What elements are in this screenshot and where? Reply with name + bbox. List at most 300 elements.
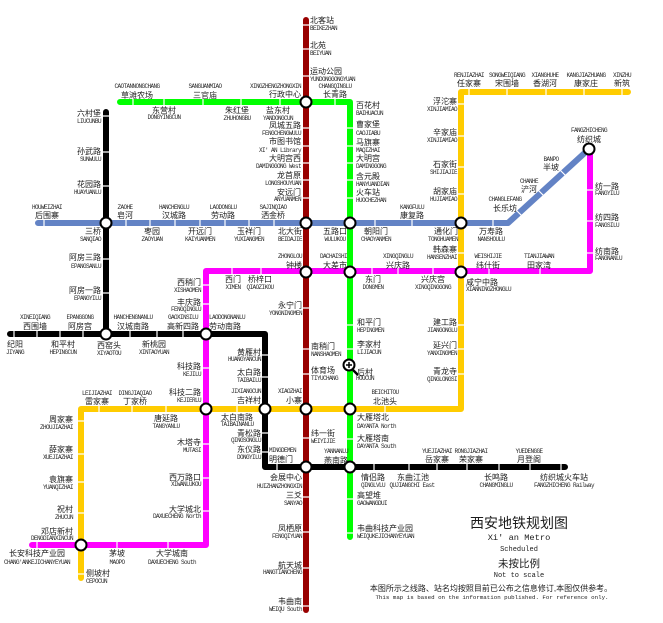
line: green <box>120 98 355 537</box>
labels: blue line, above: 洒金桥 <box>261 210 285 220</box>
labels: black line 2 vertical: JIXIANGCUN <box>231 388 262 395</box>
labels: red line north, east side: YUNDONGGONGYUAN <box>310 76 356 83</box>
labels: black line 2 vertical: XIAOZHAI <box>278 388 302 395</box>
labels: green line horizontal: 朱红堡 <box>225 105 249 115</box>
label: Xianning Zhonglu: XIANNINGZHONGLU <box>466 286 512 293</box>
title block <box>470 515 568 580</box>
labels: magenta line west vertical: XISHAOMEN <box>174 287 202 294</box>
labels: magenta line east: FANGNANLU <box>595 255 623 262</box>
labels: yellow line top: 新筑 <box>614 78 630 88</box>
labels: red line south, east side <box>311 341 342 445</box>
labels: red line south, west side <box>257 300 303 613</box>
labels: blue line, northeast branch: 浐河 <box>521 184 537 194</box>
labels: magenta line, below: 西门 <box>225 274 241 284</box>
labels: yellow line horizontal: LEIJIAZHAI <box>82 390 112 397</box>
labels: red line north, west side: XI' AN Library <box>259 147 302 154</box>
labels: magenta line east: FANGSILU <box>595 222 620 229</box>
labels: magenta line west vertical <box>153 277 202 520</box>
labels: magenta line, above: TIANJIAWAN <box>524 253 555 260</box>
labels: black line north: SANQIAO <box>80 236 102 243</box>
labels: black line east: QUJIANGCHI East <box>389 482 435 489</box>
labels: blue line, below <box>141 226 505 243</box>
labels: red line north, east side: BEIYUAN <box>310 50 332 57</box>
labels: red line north, west side: FENGCHENGWULU <box>262 130 302 137</box>
labels: blue line, below: KAIYUANMEN <box>185 236 216 243</box>
labels: red line north, west side: XINGZHENGZHONGXIN <box>250 83 302 90</box>
disclaimer note: This map is based on the information published. For reference only. <box>375 594 609 601</box>
labels: red line north, west side: 市图书馆 <box>269 136 301 146</box>
labels: black line east <box>361 448 595 489</box>
labels: yellow line north-south: 建工路 <box>433 317 457 327</box>
labels: yellow line horizontal: TANGYANLU <box>152 423 180 430</box>
labels: black line west, above: XINEIQIANG <box>20 314 51 321</box>
labels: black line west, below: 和平村 <box>51 339 75 349</box>
labels: black line north: EPANGYILU <box>74 295 102 302</box>
line: yellow <box>76 88 628 578</box>
labels: yellow line north-south <box>427 96 459 383</box>
labels: yellow line north-south: JIANGONGLU <box>427 327 458 334</box>
labels: magenta line, below: 兴庆宫 <box>421 274 445 284</box>
labels: yellow line top: SONGWEIQIANG <box>489 72 526 79</box>
labels: red line north, west side: DAMINGGONG West <box>256 163 301 170</box>
labels: blue line, below: 北大街 <box>278 226 302 236</box>
label: Xianning Zhonglu <box>466 277 512 293</box>
label: Laodong Nanlu <box>209 314 246 331</box>
labels: blue line, above: ZAOHE <box>117 204 133 211</box>
labels: magenta line east: FANGYILU <box>595 190 620 197</box>
labels: green line horizontal <box>114 83 352 122</box>
disclaimer note: 本图所示之线路、站名均按照目前已公布之信息修订,本图仅供参考。 <box>370 583 612 593</box>
labels: red line south, east side: 纬一街 <box>311 428 335 438</box>
labels: black line north: SUNWULU <box>80 156 102 163</box>
labels: green line vertical: LIJIACUN <box>357 349 382 356</box>
labels: yellow line west vertical: ZHUCUN <box>55 514 74 521</box>
labels: red line north, west side: LONGSHOUYUAN <box>265 180 302 187</box>
labels: yellow line west vertical: ZHOUJIAZHAI <box>40 424 73 431</box>
labels: red line north, west side: 安远门 <box>277 187 301 197</box>
labels: yellow line north-south: QINGLONGSI <box>427 376 457 383</box>
labels: blue line, above: HOUWEIZHAI <box>32 204 62 211</box>
labels: black line 2 vertical: DONGYILU <box>237 454 262 461</box>
labels: yellow line horizontal: 太白南路 <box>221 412 253 422</box>
labels: magenta line west vertical: XIWANLUKOU <box>171 481 202 488</box>
label: Cepocun: CEPOCUN <box>86 578 108 585</box>
labels: green line vertical: 百花村 <box>356 100 380 110</box>
labels: green line vertical: HANYUANDIAN <box>356 181 390 188</box>
title block: Xi' an Metro <box>488 533 550 543</box>
labels: red line south, west side: YONGNINGMEN <box>269 310 303 317</box>
labels: red line south, west side: HANGTIANCHENG <box>263 569 303 576</box>
labels: magenta line, interchange tops: ZHONGLOU <box>278 253 303 260</box>
labels: blue line, northeast branch: FANGZHICHENG <box>571 127 608 134</box>
labels: magenta line west vertical: KEJIERLU <box>177 397 202 404</box>
labels: magenta line, above: WEISHIJIE <box>474 253 502 260</box>
labels: black line west, below <box>6 339 170 357</box>
labels: yellow line horizontal: BEICHITOU <box>371 389 399 396</box>
labels: magenta line south <box>4 548 197 566</box>
labels: yellow line north-south: SHIJIAJIE <box>430 169 458 176</box>
labels: green line vertical: 韦曲科技产业园 <box>357 523 413 533</box>
label: Yannanlu: YANNANLU <box>324 448 349 455</box>
labels: black line west, below: HEPINGCUN <box>49 349 77 356</box>
labels: red line south, west side: 会展中心 <box>270 472 302 482</box>
labels: yellow line top: 香湖河 <box>533 78 557 88</box>
labels: green line horizontal: CAOTANNONGCHANG <box>114 83 161 90</box>
labels: blue line, above: 皂河 <box>117 210 133 220</box>
labels: yellow line west vertical: YUANQIZHAI <box>43 484 73 491</box>
labels: yellow line north-south: 浮沱寨 <box>433 96 457 106</box>
labels: black line west, below: 新桃园 <box>142 339 166 349</box>
labels: black line 2 vertical <box>228 347 302 461</box>
labels: black line north: 三桥 <box>85 226 101 236</box>
labels: black line east: 岳家寨 <box>425 454 449 464</box>
labels: black line east: 长鸣路 <box>484 472 508 482</box>
labels: blue line, above: 劳动路 <box>211 210 235 220</box>
labels: black line east: RONGJIAZHAI <box>454 448 488 455</box>
labels: black line west, above: 高新四路 <box>167 321 199 331</box>
labels: magenta line, below: QIAOZIKOU <box>246 284 274 291</box>
labels: magenta line south: 长安科技产业园 <box>9 548 65 558</box>
labels: yellow line west vertical: 邓店新村 <box>41 526 73 536</box>
labels: magenta line west vertical: 丰庆路 <box>177 297 201 307</box>
labels: black line north: 阿房三路 <box>69 252 101 262</box>
labels: black line west, above: GAOXINSILU <box>168 314 199 321</box>
label: Cepocun: 侧坡村 <box>86 568 110 578</box>
labels: black line north: 孙武路 <box>77 146 101 156</box>
labels: magenta line, interchange tops <box>278 253 347 270</box>
labels: yellow line north-south: HUJIAMIAO <box>430 196 458 203</box>
labels: green line horizontal: ZHUHONGBU <box>223 115 251 122</box>
labels: blue line, northeast branch: 半坡 <box>543 162 559 172</box>
labels: yellow line horizontal: TAIBAINANLU <box>220 421 254 428</box>
interchange stations <box>76 96 594 550</box>
labels: yellow line north-south: 胡家庙 <box>433 186 457 196</box>
labels: black line west, above: 汉城南路 <box>117 321 149 331</box>
labels: blue line, below: 朝阳门 <box>364 226 388 236</box>
labels: green line vertical: 大明宫 <box>356 153 380 163</box>
labels: magenta line west vertical: FENGQINGLU <box>171 306 202 313</box>
labels: green line vertical: 火车站 <box>356 187 380 197</box>
labels: blue line, northeast branch: CHANGLEFANG <box>488 196 522 203</box>
labels: yellow line west vertical <box>31 414 74 542</box>
labels: yellow line west vertical: 袁旗寨 <box>49 474 73 484</box>
labels: black line 2 vertical: 青松路 <box>237 428 261 438</box>
labels: magenta line, above: 兴庆路 <box>386 260 410 270</box>
labels: black line 2 vertical: QINGSONGLU <box>231 437 262 444</box>
labels: green line horizontal: 长青路 <box>323 89 347 99</box>
labels: yellow line top: RENJIAZHAI <box>454 72 484 79</box>
labels: black line west, below: XINTAOYUAN <box>139 349 170 356</box>
labels: green line horizontal: 三官庙 <box>193 90 217 100</box>
title block: Scheduled <box>500 546 538 554</box>
labels: green line vertical: 曹家堡 <box>356 119 380 129</box>
labels: yellow line west vertical: 祝村 <box>57 504 73 514</box>
labels: magenta line west vertical: 西万路口 <box>169 472 201 482</box>
labels: magenta line south: MAOPO <box>109 559 125 566</box>
labels: black line east: 纺织城火车站 <box>540 472 588 482</box>
labels: black line west, above: 西围墙 <box>23 321 47 331</box>
labels: magenta line, above: 纬什街 <box>476 260 500 270</box>
labels: yellow line north-south: XINJIAMIAO <box>427 106 458 113</box>
labels: yellow line horizontal: 唐延路 <box>154 413 178 423</box>
labels: magenta line east <box>595 181 623 262</box>
labels: red line north, west side: 大明宫西 <box>269 153 301 163</box>
labels: green line horizontal: CHANGQINGLU <box>318 83 352 90</box>
labels: red line south, east side: NANSHAOMEN <box>311 351 342 358</box>
labels: magenta line south: 茅坡 <box>109 548 125 558</box>
icon: magnifier cursor <box>344 360 358 375</box>
labels: black line west, above: 阿房宫 <box>68 321 92 331</box>
labels: red line south, west side: FENGQIYUAN <box>272 533 303 540</box>
labels: yellow line top: XIANGHUHE <box>531 72 559 79</box>
labels: magenta line, above: 田家湾 <box>527 260 551 270</box>
labels: blue line, below: YUXIANGMEN <box>234 236 265 243</box>
labels: blue line, below: WULUKOU <box>324 236 346 243</box>
labels: magenta line west vertical: 大学城北 <box>169 504 201 514</box>
label: Laodong Nanlu: 劳动南路 <box>209 321 241 331</box>
labels: green line vertical: 李家村 <box>357 339 381 349</box>
labels: yellow line west vertical: DENGDIANXINCUN <box>31 535 74 542</box>
labels: blue line, above: LAODONGLU <box>209 204 237 211</box>
label: Yannanlu <box>324 448 349 465</box>
labels: yellow line north-south: 石家街 <box>433 159 457 169</box>
labels: black line east: QINGLVLU <box>361 482 386 489</box>
labels: black line west, below: JIYANG <box>6 349 25 356</box>
labels: red line north, west side: 龙首原 <box>277 170 301 180</box>
label: Yannanlu: 燕南路 <box>324 455 348 465</box>
label: Mingdemen: 明德门 <box>269 454 293 464</box>
labels: black line west, below: 纪阳 <box>7 339 23 349</box>
labels: green line vertical: 大雁塔南 <box>357 433 389 443</box>
labels: magenta line, interchange tops: 大差市 <box>323 260 347 270</box>
labels: black line 2 vertical: HUANGYANCUN <box>228 356 262 363</box>
labels: green line vertical: 和平门 <box>357 317 381 327</box>
labels: magenta line, below: XIMEN <box>225 284 241 291</box>
labels: red line north, west side: 行政中心 <box>269 89 301 99</box>
labels: black line west, below: XIYAOTOU <box>97 350 122 357</box>
labels: magenta line, below <box>225 274 452 291</box>
labels: black line west, below: 西窑头 <box>97 340 121 350</box>
labels: magenta line west vertical: MUTASI <box>183 447 201 454</box>
labels: magenta line east: 纺四路 <box>595 212 619 222</box>
labels: green line vertical: HOUCUN <box>356 375 375 382</box>
labels: yellow line north-south: TONGHUAMEN <box>428 236 459 243</box>
labels: yellow line north-south: 韩森寨 <box>433 244 457 254</box>
line: dark red <box>301 20 311 610</box>
labels: magenta line, below: 东门 <box>365 274 381 284</box>
labels: green line vertical: CAOJIABU <box>356 130 381 137</box>
labels: magenta line west vertical: 西稍门 <box>177 277 201 287</box>
labels: magenta line, below: DONGMEN <box>362 284 384 291</box>
labels: black line north: 六村堡 <box>77 108 101 118</box>
labels: blue line, above: 汉城路 <box>162 210 186 220</box>
labels: green line vertical: BAIHUACUN <box>356 110 384 117</box>
labels: red line north, west side <box>250 83 302 203</box>
labels: green line vertical: 含元殿 <box>356 171 380 181</box>
disclaimer note <box>370 583 612 601</box>
labels: yellow line top: 康家庄 <box>574 78 598 88</box>
labels: blue line, above: 后围寨 <box>35 210 59 220</box>
label: Mingdemen: MINGDEMEN <box>269 447 297 454</box>
labels: yellow line horizontal <box>82 389 399 430</box>
labels: yellow line north-south: 通化门 <box>434 226 458 236</box>
labels: green line horizontal: 盐东村 <box>266 105 290 115</box>
labels: green line vertical: DAMINGGONG <box>356 163 387 170</box>
labels: red line south, west side: SANYAO <box>284 500 303 507</box>
labels: magenta line east: 纺南路 <box>595 246 619 256</box>
labels: green line vertical: GAOWANGDUI <box>357 500 387 507</box>
title block: 西安地铁规划图 <box>470 515 568 531</box>
labels: magenta line east: 纺一路 <box>595 181 619 191</box>
labels: red line south, west side: 航天城 <box>278 560 302 570</box>
labels: yellow line north-south: 辛家庙 <box>433 127 457 137</box>
labels: black line east: FANGZHICHENG Railway <box>534 482 595 489</box>
labels: yellow line north-south: HANSENZHAI <box>427 254 457 261</box>
labels: green line horizontal: YANDONGCUN <box>263 115 294 122</box>
labels: magenta line south: 大学城南 <box>156 548 188 558</box>
labels: blue line, above <box>32 204 425 220</box>
labels: black line north: EPANGSANLU <box>71 263 102 270</box>
labels: yellow line west vertical: 周家寨 <box>49 414 73 424</box>
labels: black line east: 月登阁 <box>517 454 541 464</box>
labels: green line horizontal: SANGUANMIAO <box>188 83 222 90</box>
labels: red line north, east side: BEIKEZHAN <box>310 25 338 32</box>
labels: yellow line north-south: 延兴门 <box>433 340 457 350</box>
labels: yellow line top: 任家寨 <box>457 78 481 88</box>
labels: black line east: 情侣路 <box>361 472 385 482</box>
labels: blue line, below: CHAOYANMEN <box>361 236 392 243</box>
labels: blue line, below: 万寿路 <box>479 226 503 236</box>
labels: green line vertical: DAYANTA North <box>357 423 397 430</box>
labels: red line north, east side: 北客站 <box>310 15 334 25</box>
labels: black line east: 东曲江池 <box>397 472 429 482</box>
labels: red line north, east side: 北苑 <box>310 40 326 50</box>
labels: yellow line north-south: 青龙寺 <box>433 366 457 376</box>
label: Xianning Zhonglu: 咸宁中路 <box>466 277 498 287</box>
labels: yellow line top: XINZHU <box>613 72 632 79</box>
labels: green line vertical: 后村 <box>357 367 373 377</box>
labels: magenta line south: DAXUECHENG South <box>148 559 197 566</box>
labels: black line 2 vertical: 小寨 <box>286 395 302 405</box>
line: black <box>10 112 565 471</box>
labels: black line 2 vertical: 太白路 <box>237 367 261 377</box>
labels: blue line, below: BEIDAJIE <box>278 236 303 243</box>
labels: magenta line, above: XINGQINGLU <box>383 253 414 260</box>
labels: blue line, northeast branch: CHANHE <box>520 178 539 185</box>
labels: yellow line top: 宋围墙 <box>495 78 519 88</box>
labels: red line south, east side: 南稍门 <box>311 341 335 351</box>
labels: black line east: 荣家寨 <box>459 454 483 464</box>
labels: black line 2 vertical: 吉祥村 <box>237 395 261 405</box>
labels: magenta line west vertical: KEJILU <box>183 371 202 378</box>
labels: magenta line, below: 桥梓口 <box>248 274 272 284</box>
labels: black line 2 vertical: 东仪路 <box>237 444 261 454</box>
labels: red line south, west side: 永宁门 <box>278 300 302 310</box>
labels: yellow line top <box>454 72 632 88</box>
labels: green line vertical: HUOCHEZHAN <box>356 197 387 204</box>
labels: black line west, above: HANCHENGNANLU <box>113 314 153 321</box>
labels: magenta line west vertical: 科技二路 <box>169 387 201 397</box>
labels: black line west, above: EPANGGONG <box>66 314 94 321</box>
labels: yellow line horizontal: 北池头 <box>373 396 397 406</box>
labels: green line vertical: WEIQUKEJICHANYEYUAN <box>357 533 415 540</box>
title block: 未按比例 <box>498 557 540 570</box>
labels: red line south, east side: 体育场 <box>311 365 335 375</box>
labels: green line horizontal: 草滩农场 <box>121 90 153 100</box>
labels: magenta line west vertical: 木塔寺 <box>177 437 201 447</box>
labels: blue line, above: HANCHENGLU <box>159 204 190 211</box>
labels: green line vertical: DAYANTA South <box>357 443 397 450</box>
labels: black line east: YUEDENGGE <box>515 448 543 455</box>
labels: blue line, northeast branch: BANPO <box>543 156 559 163</box>
labels: red line north, east side <box>310 15 356 83</box>
labels: green line vertical: 高望堆 <box>357 490 381 500</box>
labels: blue line, below: 枣园 <box>144 226 160 236</box>
labels: blue line, northeast branch: 长乐坊 <box>493 203 517 213</box>
labels: green line vertical: HEPINGMEN <box>357 327 385 334</box>
labels: black line west, above <box>20 314 199 331</box>
labels: red line south, east side: WEIYIJIE <box>311 438 336 445</box>
labels: red line south, west side: 三爻 <box>286 491 302 500</box>
labels: red line north, west side: ANYUANMEN <box>274 196 302 203</box>
labels: red line north, east side: 运动公园 <box>310 66 342 76</box>
labels: yellow line horizontal: 雷家寨 <box>85 396 109 406</box>
labels: magenta line west vertical: DAXUECHENG North <box>153 513 202 520</box>
line: blue <box>38 149 589 227</box>
labels: black line east: YUEJIAZHAI <box>422 448 452 455</box>
labels: red line south, west side: 凤栖原 <box>278 523 302 533</box>
labels: black line north: LIUCUNBU <box>77 118 102 125</box>
labels: red line south, west side: WEIQU South <box>269 606 303 613</box>
title block: Not to scale <box>494 572 544 580</box>
labels: blue line, below: 五路口 <box>323 226 347 236</box>
labels: black line north: HUAYUANLU <box>74 189 102 196</box>
labels: magenta line, interchange tops: 钟楼 <box>286 260 302 270</box>
labels: blue line, northeast branch: 纺织城 <box>577 134 601 144</box>
labels: green line vertical: 大雁塔北 <box>357 412 389 422</box>
labels: blue line, above: SAJINQIAO <box>259 204 287 211</box>
labels: blue line, below: NANSHOULU <box>477 236 505 243</box>
labels: blue line, above: KANGFULU <box>400 204 425 211</box>
labels: black line north: 花园路 <box>77 179 101 189</box>
labels: blue line, above: 康复路 <box>400 210 424 220</box>
line: magenta <box>32 149 595 549</box>
labels: red line south, east side: TIYUCHANG <box>311 375 339 382</box>
labels: red line north, west side: 凤城五路 <box>269 120 301 130</box>
labels: yellow line west vertical: 薛家寨 <box>49 444 73 454</box>
labels: magenta line, below: XINGQINGGONG <box>415 284 452 291</box>
label: Mingdemen <box>269 447 297 464</box>
labels: black line north: 阿房一路 <box>69 285 101 295</box>
labels: green line horizontal: 东营村 <box>152 105 176 115</box>
labels: blue line, below: 玉祥门 <box>237 226 261 236</box>
label: Cepocun <box>86 568 110 585</box>
labels: black line east: CHANGMINGLU <box>479 482 513 489</box>
labels: green line vertical: 马旗寨 <box>356 137 380 147</box>
labels: yellow line west vertical: XUEJIAZHAI <box>43 454 73 461</box>
labels: magenta line west vertical: 科技路 <box>177 361 201 371</box>
label: Laodong Nanlu: LAODONGNANLU <box>209 314 246 321</box>
labels: black line north <box>69 108 102 302</box>
labels: black line 2 vertical: TAIBAILU <box>237 377 262 384</box>
labels: yellow line top: KANGJIAZHUANG <box>566 72 606 79</box>
labels: red line south, west side: HUIZHANZHONGXIN <box>257 483 303 490</box>
labels: yellow line north-south: XINJIAMIAO <box>427 137 458 144</box>
labels: magenta line, interchange tops: DACHAISHI <box>320 253 347 260</box>
labels: green line vertical <box>356 100 415 540</box>
labels: blue line, below: ZAOYUAN <box>141 236 163 243</box>
labels: green line horizontal: DONGYINGCUN <box>147 114 181 121</box>
